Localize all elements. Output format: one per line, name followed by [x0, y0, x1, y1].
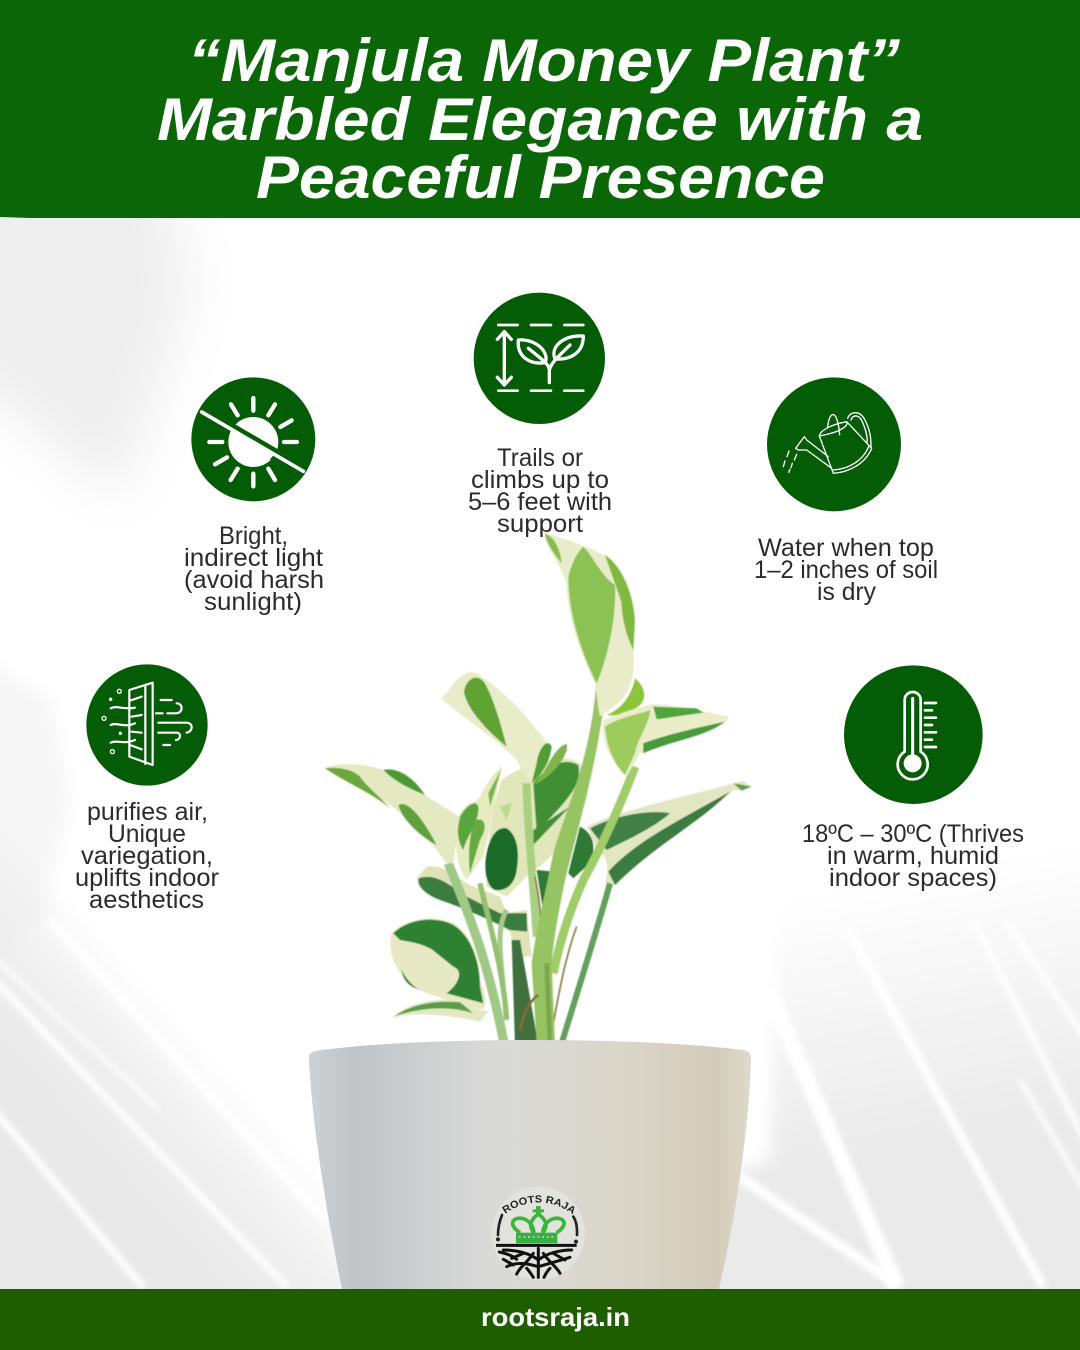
stems — [448, 767, 635, 1045]
small bright leaf — [607, 678, 644, 715]
stem base and twig — [520, 963, 550, 1043]
main stem — [532, 687, 606, 1043]
text: temperature: 18ºC – 30ºC (Thrives — [802, 820, 1024, 848]
icon: plant height — [474, 293, 605, 424]
footer band — [0, 1289, 1080, 1350]
text: light: Bright, — [219, 522, 288, 550]
text: height: climbs up to — [471, 466, 609, 494]
text: water: is dry — [817, 578, 876, 606]
text: air: uplifts indoor — [75, 864, 219, 892]
plant: variegated money plant — [324, 532, 752, 1045]
text: height — [468, 444, 612, 538]
text: height: Trails or — [497, 444, 583, 472]
text: height: support — [497, 510, 583, 538]
upper left leaf — [441, 672, 567, 785]
text: light: (avoid harsh — [184, 566, 324, 594]
icon: no direct sun — [191, 377, 315, 501]
left leaf — [324, 764, 460, 863]
text: air — [75, 798, 219, 914]
text: height: 5–6 feet with — [468, 488, 612, 516]
icon: watering can — [767, 377, 901, 511]
logo: Roots Raja sticker: ROOTS RAJA — [502, 1195, 574, 1214]
title — [157, 27, 923, 211]
text: light: indirect light — [184, 544, 323, 572]
text: water: 1–2 inches of soil — [754, 556, 938, 584]
icon: thermometer — [844, 665, 983, 804]
right low leaf — [587, 781, 752, 885]
pot — [309, 1040, 751, 1289]
text: air: aesthetics — [89, 886, 204, 914]
text: light — [184, 522, 324, 616]
center back leaf — [485, 758, 588, 897]
logo: Roots Raja sticker — [492, 1187, 585, 1280]
top leaf — [543, 532, 635, 717]
text: water: Water when top — [758, 534, 934, 562]
text: air: variegation, — [81, 842, 213, 870]
title: Marbled Elegance with a — [157, 86, 923, 153]
text: light: sunlight) — [204, 588, 302, 616]
text: air: Unique — [108, 820, 186, 848]
text: temperature: indoor spaces) — [829, 864, 997, 892]
back dark leaves — [417, 827, 593, 957]
header band — [0, 0, 1080, 218]
text: air: purifies air, — [87, 798, 208, 826]
lowest leaf — [392, 1000, 490, 1022]
bottom left leaf — [390, 918, 486, 1010]
center upright leaf — [456, 767, 502, 880]
text: water — [754, 534, 938, 606]
icon: air purifier — [86, 664, 208, 786]
text: temperature — [802, 820, 1024, 892]
right upper leaf — [603, 704, 729, 777]
title: Peaceful Presence — [256, 144, 825, 211]
text: temperature: in warm, humid — [827, 842, 999, 870]
title: “Manjula Money Plant” — [188, 27, 900, 94]
website url: rootsraja.in — [481, 1302, 630, 1332]
